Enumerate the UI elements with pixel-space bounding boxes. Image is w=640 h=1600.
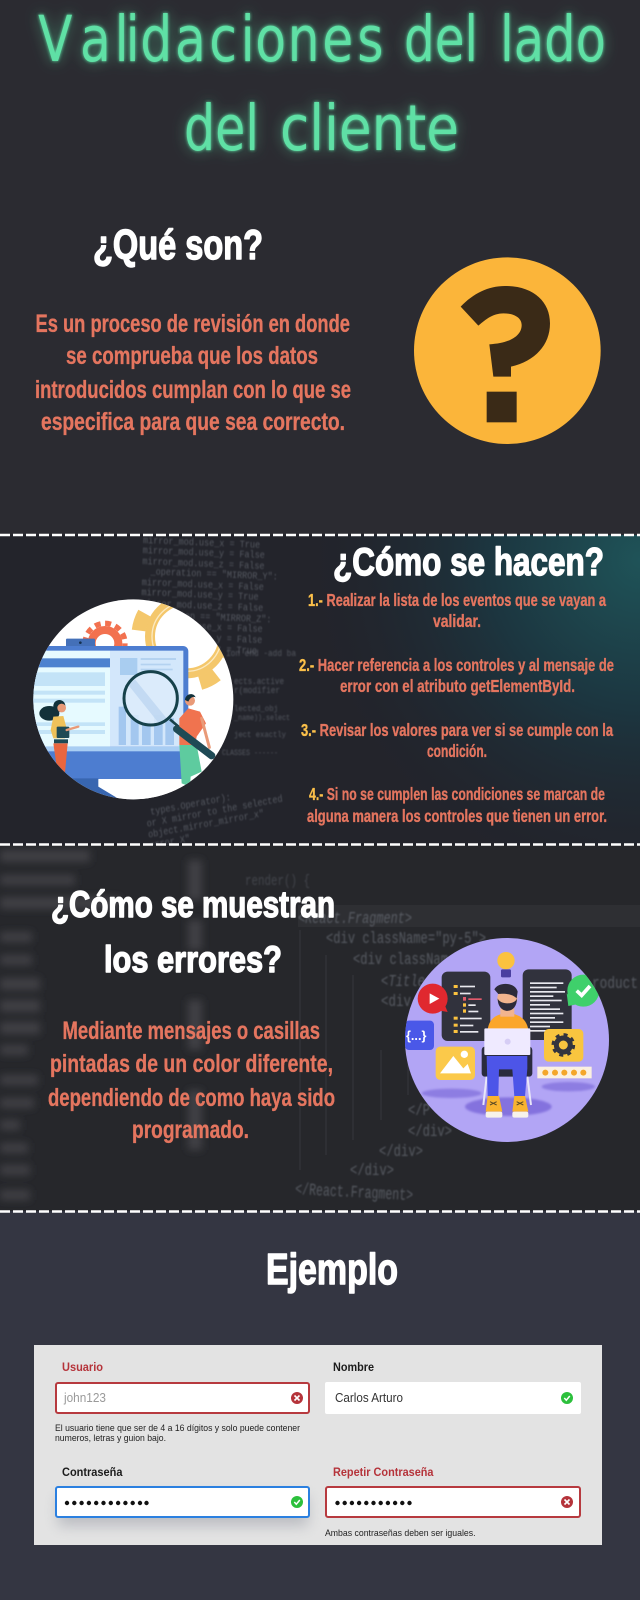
field: usuario: john123	[63, 1390, 106, 1405]
field: nombre	[325, 1360, 581, 1414]
field: contrasena: Contraseña	[62, 1465, 123, 1479]
panel: como se hacen: _name)).select	[233, 714, 290, 723]
text block: explanation: dependiendo de como haya sido	[48, 1084, 335, 1112]
text block: definition: introducidos cumplan con lo que se	[35, 376, 351, 404]
panel: como se muestran los errores: render() {	[245, 873, 310, 890]
panel: como se hacen: _operation == "MIRROR_Y":	[149, 566, 278, 583]
panel: como se hacen: error X"	[149, 832, 191, 852]
heading: como se muestran los errores	[51, 884, 335, 980]
illustration: developer with laptop: {...}	[406, 1029, 426, 1043]
heading: que son: ¿Qué son?	[93, 221, 263, 268]
panel: que son	[35, 221, 601, 444]
heading: como se muestran los errores: los errores?	[104, 939, 282, 980]
title	[38, 3, 606, 165]
panel: como se hacen: mirror_mod.use_x = False	[140, 618, 263, 635]
panel: como se hacen: mirror_mod.use_x = False	[142, 576, 264, 593]
panel: como se hacen	[0, 534, 640, 852]
panel: como se hacen: operation == "MIRROR_Z":	[149, 609, 272, 626]
heading: ejemplo: Ejemplo	[266, 1245, 398, 1294]
panel: como se hacen: lected_obj	[234, 705, 278, 714]
panel: como se hacen: or X mirror to the selected	[146, 793, 283, 830]
field: usuario: numeros, letras y guion bajo.	[55, 1433, 166, 1443]
panel: como se hacen: mirror_mod.use_y = False	[140, 629, 263, 646]
text block: definition: especifica para que sea correcto.	[41, 408, 345, 436]
panel: como se hacen: mirror_mod.use_y = False	[143, 544, 265, 561]
text block: steps: error con el atributo getElementById.	[340, 676, 575, 696]
panel: como se hacen: mirror_mod.use_z = False	[142, 555, 265, 572]
panel: como se hacen: mirror_mod.use_y = True	[141, 586, 259, 603]
text block: explanation	[48, 1017, 335, 1144]
panel: como se muestran los errores: </P	[408, 1102, 430, 1121]
panel: como se hacen: ects.active	[234, 677, 284, 687]
field: nombre: Nombre	[333, 1360, 374, 1374]
panel: como se muestran los errores: <div	[381, 993, 411, 1012]
field: usuario: El usuario tiene que ser de 4 a 16 dígitos y solo puede contener	[55, 1423, 300, 1433]
panel: como se muestran los errores: </div>	[350, 1162, 394, 1181]
form example	[34, 1345, 602, 1545]
field: repetir contrasena: Repetir Contraseña	[333, 1465, 434, 1479]
panel: como se hacen: mirror_mod.use_z = False	[141, 597, 263, 614]
text block: definition: Es un proceso de revisión en donde	[36, 310, 350, 338]
field: nombre: Carlos Arturo	[335, 1390, 403, 1405]
text block: steps	[299, 590, 614, 826]
heading: como se muestran los errores: ¿Cómo se muestran	[51, 884, 335, 925]
panel: como se muestran los errores: <div classNam	[353, 951, 448, 970]
field: contrasena	[56, 1465, 309, 1526]
text block: explanation: pintadas de un color diferente,	[50, 1050, 333, 1078]
panel: como se hacen: mirror_mod.use_x = True	[143, 534, 260, 551]
panel: como se muestran los errores: <Title	[381, 973, 425, 992]
text block: steps: condición.	[427, 741, 487, 761]
illustration: magnifier over monitor	[33, 599, 234, 800]
field: usuario: Usuario	[62, 1360, 103, 1374]
title: Validaciones	[38, 4, 383, 76]
text block: explanation: programado.	[132, 1116, 249, 1144]
title: del	[184, 92, 259, 165]
panel: como se muestran los errores: <React.Fragment>	[298, 910, 412, 929]
panel: como se hacen: CLASSES ------	[222, 749, 278, 758]
panel: como se muestran los errores	[0, 845, 640, 1211]
panel: como se muestran los errores: </div>	[379, 1143, 423, 1162]
panel: como se hacen: ion end -add ba	[226, 649, 297, 659]
text block: definition: se comprueba que los datos	[66, 342, 318, 370]
illustration: developer with laptop	[405, 938, 609, 1142]
panel: como se hacen: object.mirror_mirror_x"	[147, 808, 265, 841]
title: del	[404, 3, 478, 76]
field: usuario	[55, 1360, 309, 1443]
panel: como se muestran los errores: </div>	[408, 1123, 452, 1142]
panel: page background top	[0, 0, 640, 536]
field: repetir contrasena: Ambas contraseñas deben ser iguales.	[325, 1528, 476, 1538]
icon: question mark	[414, 257, 601, 444]
panel: como se muestran los errores: </React.Fragment>	[295, 1181, 414, 1206]
panel: ejemplo	[0, 1211, 640, 1600]
panel: como se hacen: mirror_mod.use_z = True	[140, 640, 257, 657]
text block: explanation: Mediante mensajes o casillas	[62, 1017, 320, 1045]
title: cliente	[280, 92, 459, 165]
title: lado	[500, 3, 606, 76]
panel: como se hacen: r(modifier	[234, 686, 280, 696]
text block: steps: validar.	[433, 611, 481, 631]
panel: como se hacen: types.Operator):	[150, 791, 232, 818]
panel: como se muestran los errores: <div className="py-5">	[326, 930, 486, 949]
field: repetir contrasena	[325, 1465, 580, 1538]
text block: definition	[35, 310, 351, 436]
panel: como se hacen: ject exactly	[234, 731, 286, 740]
